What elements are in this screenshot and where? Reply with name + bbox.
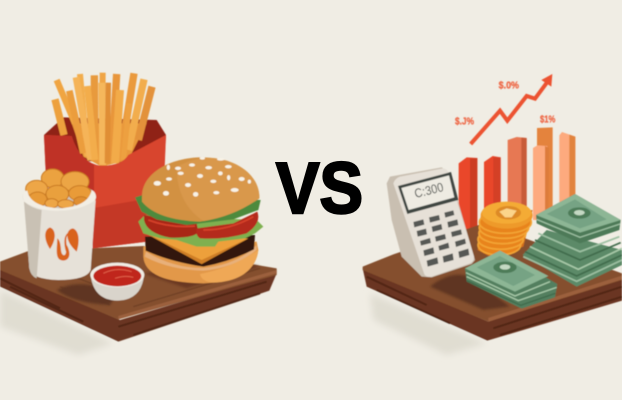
calculator keys — [413, 210, 469, 267]
calculator — [387, 167, 475, 277]
tater tot cup — [23, 169, 96, 280]
arrow head — [541, 74, 552, 87]
fries box — [44, 73, 166, 248]
coin stack — [478, 202, 533, 257]
ketchup dish — [90, 263, 144, 301]
chart labels: $.0% — [499, 80, 519, 91]
chart labels — [455, 80, 555, 128]
right scene: money on a wooden board — [363, 74, 622, 355]
sesame seeds — [154, 157, 251, 197]
trend arrow — [471, 79, 549, 144]
chart labels: $.J% — [455, 117, 474, 128]
VS heading: VS — [276, 149, 363, 229]
cup logo — [45, 227, 79, 261]
chart labels: $1% — [540, 114, 555, 125]
wooden board — [363, 223, 622, 341]
fries — [55, 73, 152, 167]
large cash stack — [523, 194, 622, 287]
wooden board — [0, 246, 277, 342]
small cash stack — [465, 251, 557, 309]
tots — [26, 169, 91, 208]
left scene: fast food on a wooden board — [0, 73, 277, 355]
bar chart — [459, 127, 575, 233]
burger — [135, 157, 263, 283]
calculator display: C:300 — [413, 180, 445, 201]
